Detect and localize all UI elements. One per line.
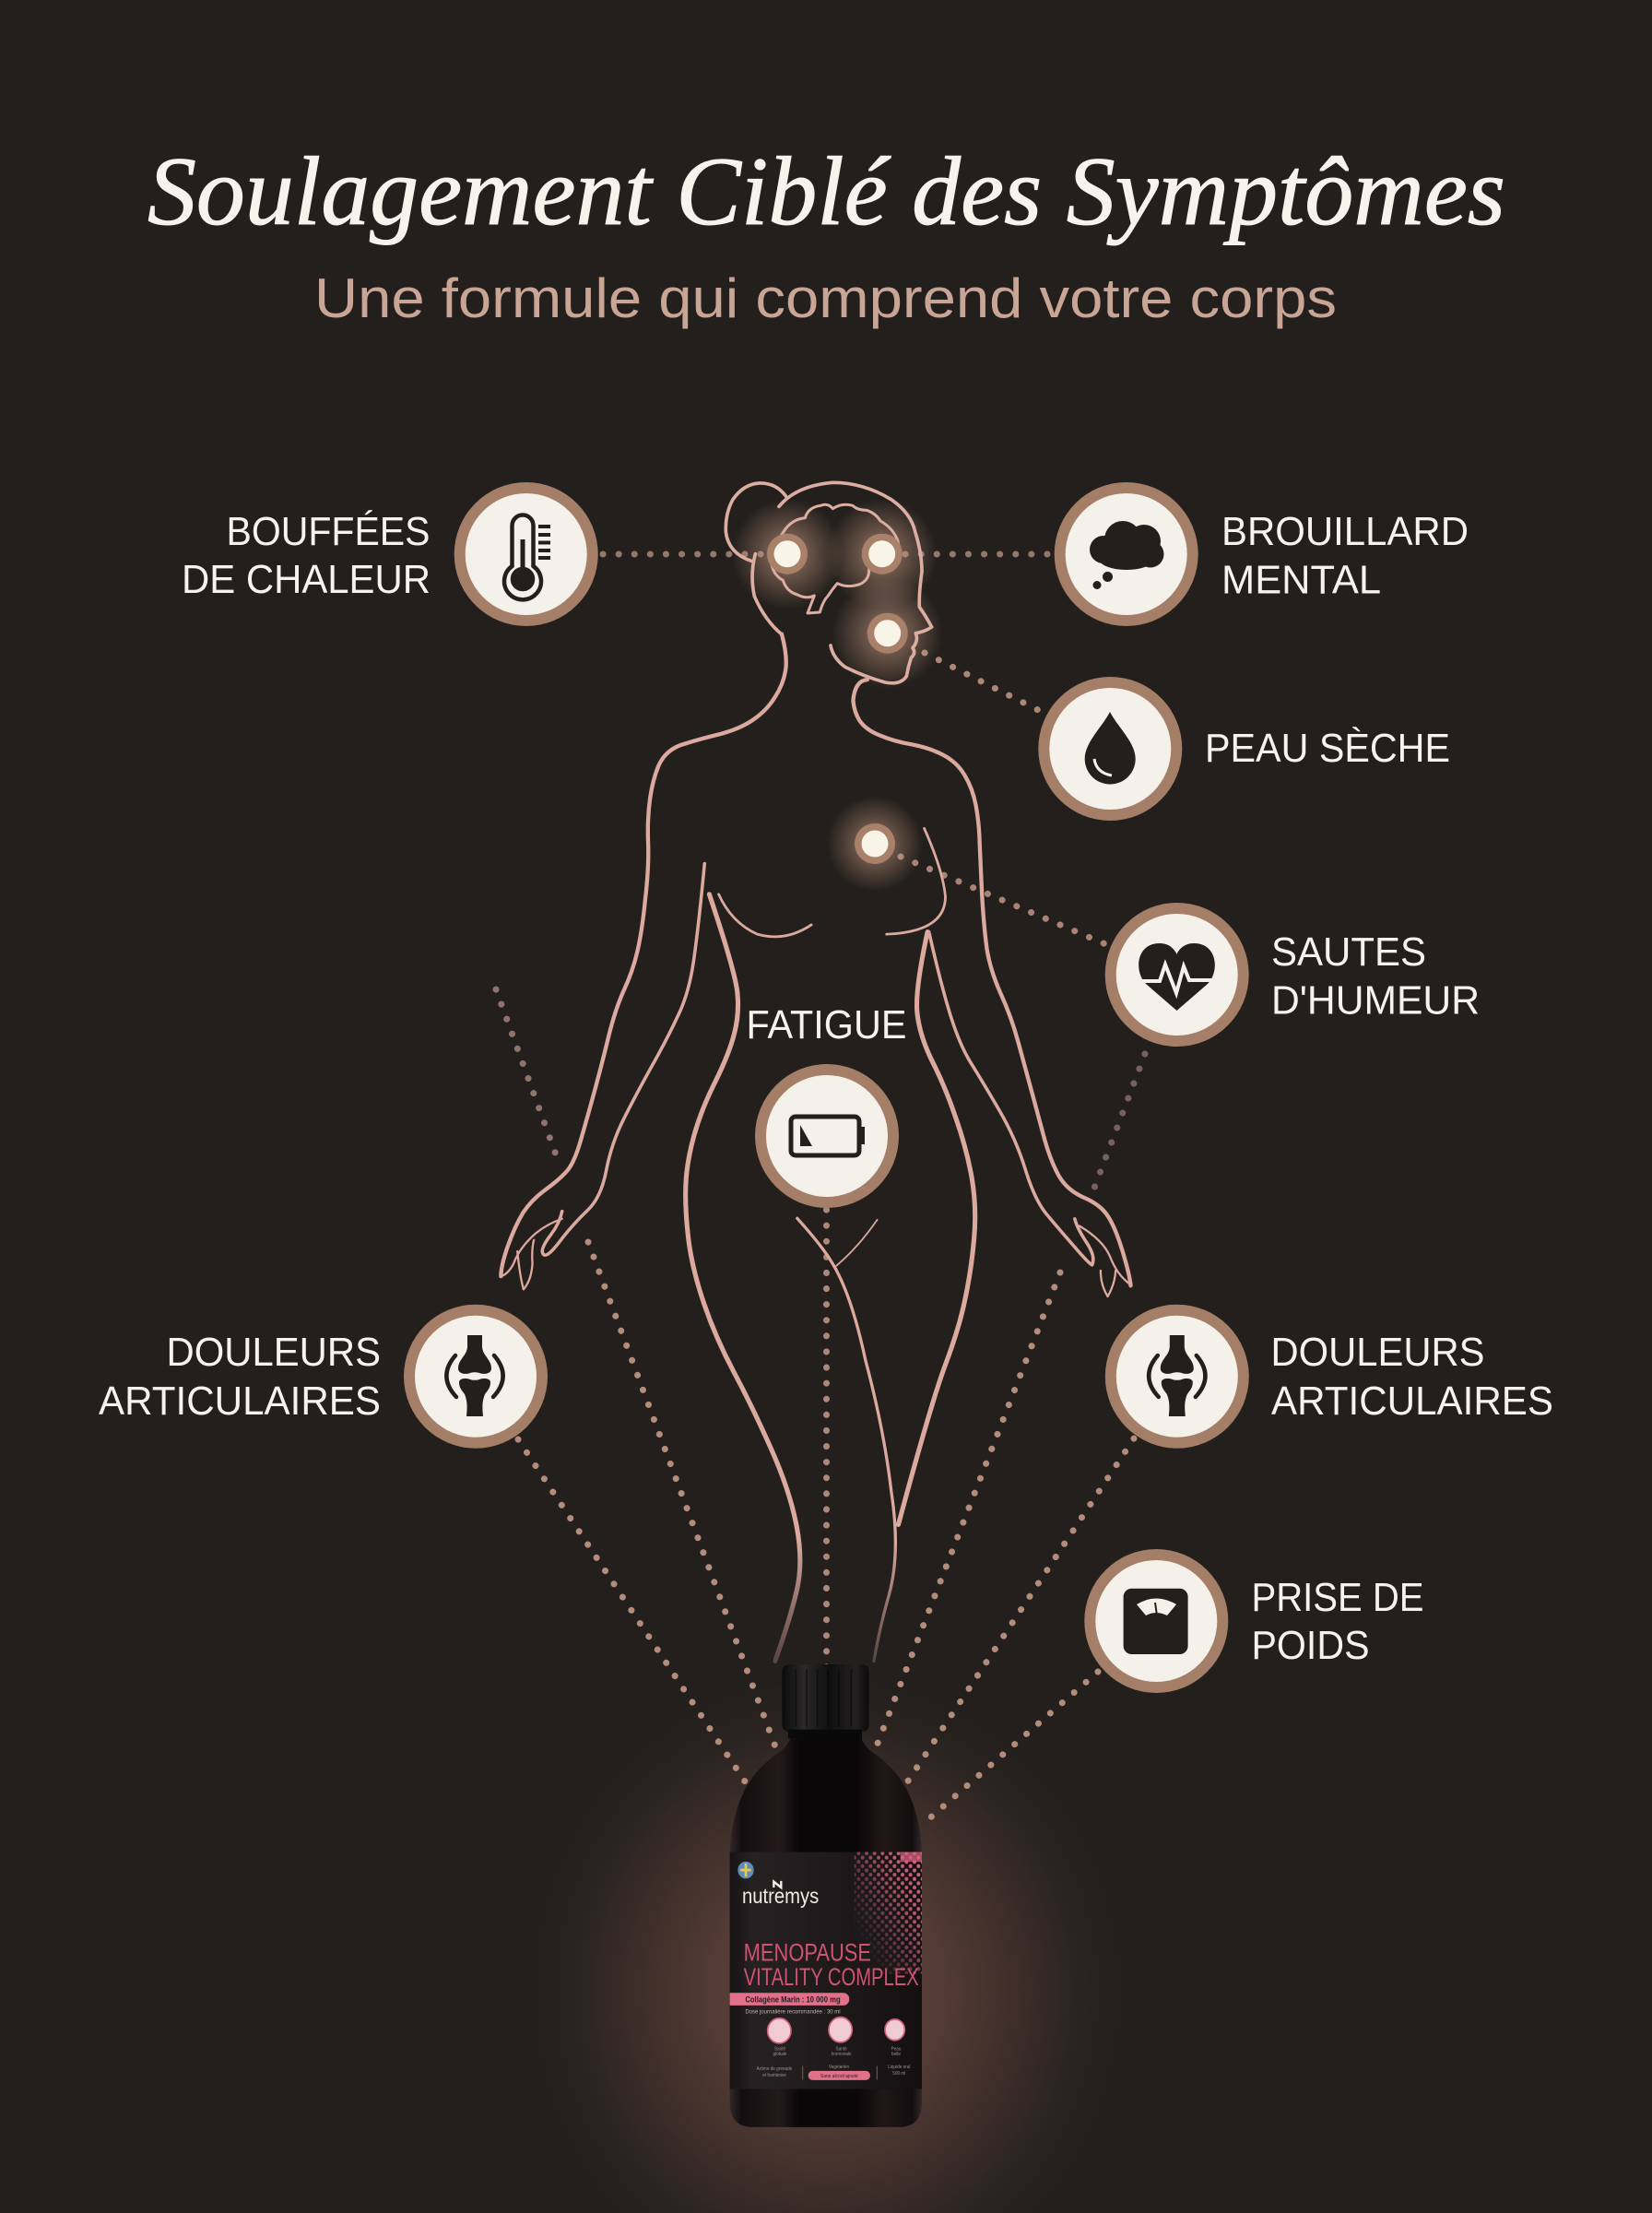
right hand <box>1080 1225 1131 1296</box>
icon: water drop <box>1085 712 1136 784</box>
label: douleurs articulaires left <box>99 1330 381 1424</box>
icon badge: joint pain left <box>404 1305 548 1449</box>
back of head <box>752 554 782 634</box>
bottle glass <box>730 1730 922 2127</box>
label: brouillard mental: MENTAL <box>1221 557 1381 603</box>
swedish flag badge <box>738 1862 754 1878</box>
label: prise de poids: PRISE DE <box>1252 1575 1423 1620</box>
product name: VITALITY COMPLEX <box>744 1964 919 1991</box>
left hand <box>501 1219 562 1289</box>
dotted connector lines <box>496 554 1145 1820</box>
benefit captions: hormonale <box>832 2052 852 2057</box>
icon: low battery <box>791 1117 865 1155</box>
label panel <box>730 1852 922 2089</box>
footer text: et framboise <box>762 2073 786 2078</box>
right shoulder and outer arm <box>854 680 1131 1285</box>
label: bouffées de chaleur <box>182 509 431 602</box>
label: sautes d'humeur: SAUTES <box>1271 929 1426 975</box>
footer text: Arôme de grenade <box>757 2066 793 2072</box>
bottle glow <box>532 1678 1122 2213</box>
body silhouette outline <box>501 634 1131 1661</box>
collagen pill: Collagène Marin : 10 000 mg <box>745 1994 841 2005</box>
left inner arm <box>542 864 704 1255</box>
label: peau sèche: PEAU SÈCHE <box>1205 726 1450 771</box>
label: brouillard mental: BROUILLARD <box>1221 509 1469 554</box>
halftone pattern <box>854 1852 922 1974</box>
title: Soulagement Ciblé des Symptômes <box>148 137 1505 245</box>
product name: MENOPAUSE <box>744 1940 871 1966</box>
chest lines <box>719 828 946 937</box>
hair and face profile <box>779 482 932 683</box>
benefit icons <box>768 2018 904 2043</box>
glow point: chest <box>827 796 923 892</box>
icon badge: dry skin <box>1038 677 1182 821</box>
label: douleurs articulaires right: DOULEURS <box>1270 1330 1484 1375</box>
left torso and leg <box>686 894 800 1661</box>
right torso and leg <box>898 932 975 1524</box>
label: douleurs articulaires right: ARTICULAIRES <box>1271 1379 1553 1424</box>
icon: bathroom scale <box>1124 1589 1188 1654</box>
glow point: temple left <box>767 534 808 574</box>
icon badge: mood swings <box>1105 903 1249 1047</box>
label: sautes d'humeur <box>1271 929 1480 1024</box>
hair bun <box>726 483 786 561</box>
footer text: 500 ml <box>892 2071 905 2077</box>
icon badge: weight gain <box>1084 1549 1228 1693</box>
benefit captions: Peau <box>891 2046 902 2052</box>
right inner arm <box>929 932 1093 1265</box>
subtitle: Une formule qui comprend votre corps <box>314 267 1337 329</box>
collagen pill <box>730 1993 849 2006</box>
benefit captions: Santé <box>836 2046 847 2052</box>
label: douleurs articulaires left: DOULEURS <box>166 1330 381 1375</box>
product bottle <box>730 1664 922 2127</box>
footer pill <box>808 2071 870 2080</box>
benefit captions: globale <box>773 2052 787 2057</box>
label: douleurs articulaires left: ARTICULAIRES <box>99 1379 381 1424</box>
icon: knee joint <box>1149 1335 1205 1416</box>
inner leg and pelvis <box>797 1218 895 1661</box>
label: fatigue: FATIGUE <box>747 1002 907 1047</box>
label: douleurs articulaires right <box>1270 1330 1553 1424</box>
product name <box>744 1940 919 1991</box>
glow halo: head <box>732 499 943 689</box>
head and brain outline <box>726 482 932 683</box>
footer pill: Sans alcool ajouté <box>820 2074 858 2079</box>
footer dividers <box>803 2066 877 2080</box>
footer text: Vegetarien <box>829 2065 849 2070</box>
footer text <box>757 2065 910 2078</box>
benefit captions: Santé <box>774 2046 785 2052</box>
glow point: temple right <box>862 534 903 574</box>
label: bouffées de chaleur: BOUFFÉES <box>227 509 430 554</box>
brand logo: nutremys <box>742 1883 819 1908</box>
icon badge: fatigue <box>755 1064 899 1208</box>
icon badge: brain fog <box>1055 482 1198 626</box>
glow point: cheek <box>867 613 908 654</box>
label: prise de poids: POIDS <box>1252 1623 1370 1668</box>
icon badge: joint pain right <box>1105 1305 1249 1449</box>
label: prise de poids <box>1252 1575 1423 1668</box>
label: sautes d'humeur: D'HUMEUR <box>1271 977 1480 1024</box>
icon: thought cloud <box>1090 521 1163 589</box>
bottle cap <box>782 1664 869 1738</box>
dose text: Dose journalière recommandée : 30 ml <box>745 2008 841 2015</box>
icon badge: hot flashes <box>454 482 598 626</box>
footer text: Liquide oral <box>888 2065 910 2070</box>
benefit captions <box>773 2046 902 2057</box>
benefit captions: belle <box>891 2052 901 2057</box>
icon: thermometer <box>504 515 550 599</box>
label: bouffées de chaleur: DE CHALEUR <box>182 557 431 602</box>
icon: knee joint <box>446 1335 503 1416</box>
label: brouillard mental <box>1221 509 1469 603</box>
brain outline <box>772 504 899 613</box>
icon: heart with pulse <box>1136 943 1219 1011</box>
left shoulder and outer arm <box>501 634 786 1276</box>
